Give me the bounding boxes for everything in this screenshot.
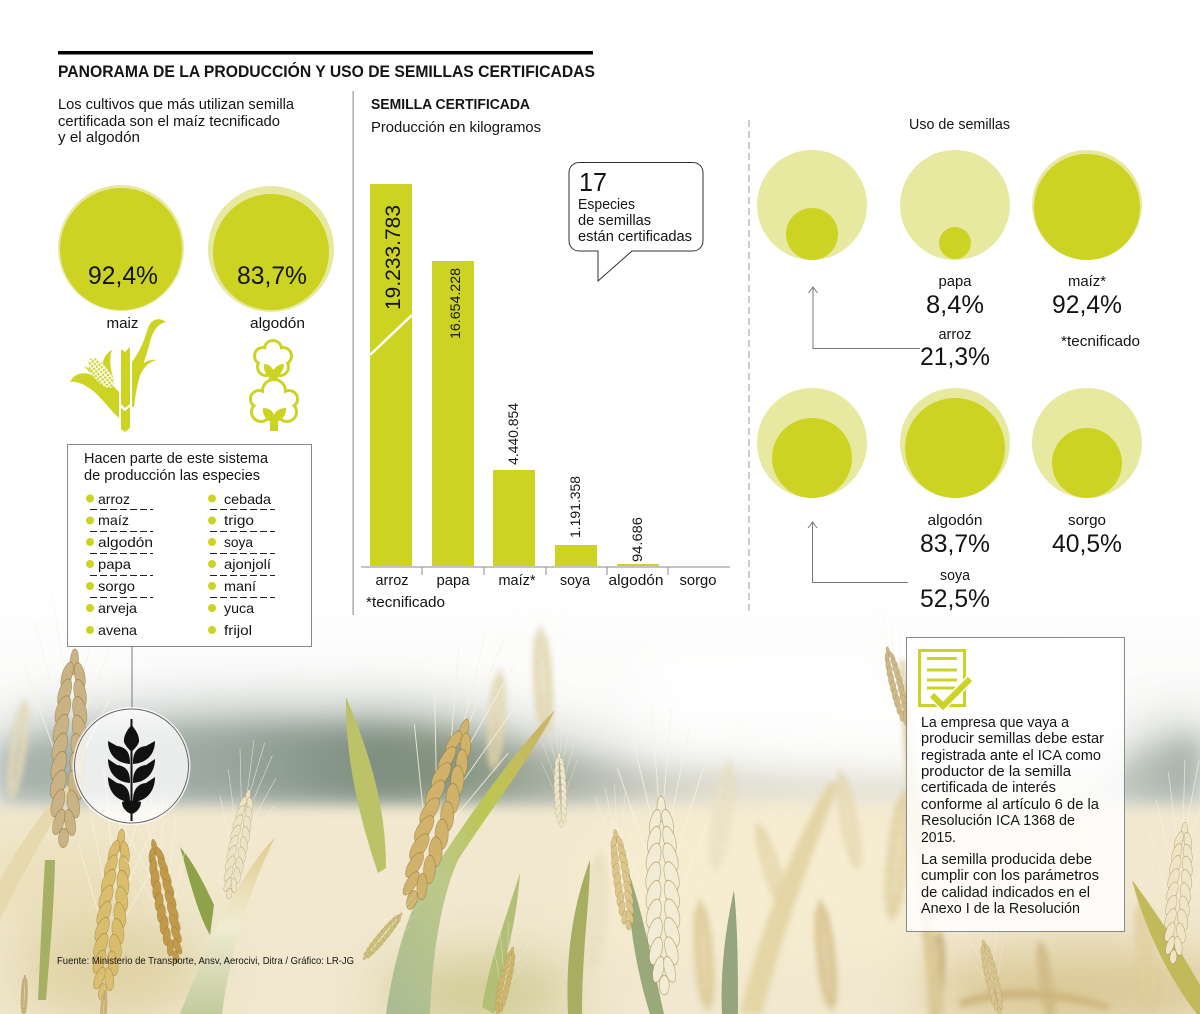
intro text (58, 97, 295, 146)
requirements text: registrada ante el ICA como (921, 748, 1101, 764)
requirements text: de calidad indicados en el (921, 885, 1090, 901)
source: Fuente: Ministerio de Transporte, Ansv, Aerocivi, Ditra / Gráfico: LR-JG (57, 955, 354, 967)
top rule (58, 51, 593, 54)
axis labels: soya (560, 573, 591, 589)
circle: papa use (900, 150, 1010, 260)
list names: soya (224, 534, 253, 550)
icon: corn plant (70, 319, 166, 432)
label: sorgo (1052, 513, 1122, 558)
label: maiz: maiz (106, 316, 138, 332)
label: algodon: algodón (928, 513, 982, 529)
label: maiz tecnificado: maíz* (1068, 274, 1106, 290)
axis labels: arroz (376, 573, 408, 589)
bar: soya: 1.191.358 (567, 476, 583, 538)
requirements text: 2015. (921, 830, 956, 846)
panel: requirements (906, 638, 1124, 932)
chart subtitle: Producción en kilogramos (371, 120, 541, 136)
icon: document with check (920, 650, 970, 706)
list heading (84, 451, 269, 484)
bar: algodon: 94.686 (629, 517, 645, 562)
circle: algodon use (900, 388, 1010, 498)
intro text: certificada son el maíz tecnificado (58, 114, 280, 130)
circle: arroz use (757, 150, 867, 260)
bar: papa: 16.654.228 (447, 268, 463, 339)
axis labels: sorgo (680, 573, 716, 589)
circle: soya use (757, 388, 867, 498)
panel: species list (68, 444, 312, 646)
callout: 17 (579, 167, 607, 197)
list names (98, 491, 271, 638)
list dividers (90, 510, 275, 598)
label: algodon (920, 513, 990, 558)
list names: trigo (224, 512, 254, 528)
label: arroz: 21,3% (920, 343, 990, 371)
label: algodon: algodón (250, 316, 305, 332)
label: algodon: 83,7% (920, 530, 990, 558)
wheat spikes (14, 559, 1200, 1014)
axis (361, 567, 730, 575)
list heading: de producción las especies (84, 468, 260, 484)
callout: Especies (578, 197, 635, 213)
leaves (0, 697, 1200, 1014)
bar: algodon (617, 517, 659, 566)
list names: frijol (224, 622, 252, 638)
label: arroz: arroz (938, 327, 972, 343)
vertical divider (352, 91, 354, 615)
requirements text: La semilla producida debe (921, 852, 1092, 868)
axis labels (376, 573, 716, 589)
list names: cebada (224, 491, 271, 507)
label: papa (926, 274, 984, 319)
label: papa: papa (938, 274, 972, 290)
arrow: arroz (808, 287, 920, 348)
requirements text: La empresa que vaya a (921, 715, 1070, 731)
requirements text: certificada de interés (921, 780, 1056, 796)
circle: sorgo use (1032, 388, 1142, 498)
list names: maíz (98, 512, 129, 528)
requirements text: productor de la semilla (921, 764, 1072, 780)
label: soya: 52,5% (920, 585, 990, 613)
far blurred stalks (0, 574, 1179, 1014)
callout: están certificadas (578, 229, 692, 245)
label: soya (920, 568, 990, 613)
requirements text: cumplir con los parámetros (921, 868, 1099, 884)
list names: ajonjolí (224, 556, 271, 572)
circle: maiz use (1032, 150, 1142, 260)
requirements text: Resolución ICA 1368 de (921, 813, 1075, 829)
icon: cotton (249, 339, 299, 431)
label: maiz tecnificado (1052, 274, 1122, 319)
panel: algodon share circle: 83,7% (237, 262, 307, 290)
axis labels: algodón (608, 573, 664, 589)
label: sorgo: sorgo (1068, 513, 1106, 529)
axis labels: papa (436, 573, 470, 589)
connector line (132, 646, 133, 710)
bar: maiz (493, 403, 535, 566)
requirements text: conforme al artículo 6 de la (921, 797, 1100, 813)
icon: wheat badge (72, 707, 190, 825)
bar: arroz: 19.233.783 (382, 205, 405, 310)
chart footnote: *tecnificado (366, 595, 445, 611)
list names: maní (224, 578, 256, 594)
callout: de semillas (578, 213, 651, 229)
list names: arroz (98, 491, 130, 507)
panel: algodon share circle (208, 186, 334, 312)
bar: papa (432, 261, 474, 566)
bar: soya (555, 476, 597, 566)
footnote: tecnificado: *tecnificado (1061, 334, 1140, 350)
list names: avena (98, 622, 137, 638)
callout (569, 162, 703, 281)
list names: yuca (224, 600, 254, 616)
intro text: Los cultivos que más utilizan semilla (58, 97, 295, 113)
bar chart (361, 184, 730, 589)
list heading: Hacen parte de este sistema (84, 451, 269, 467)
list names: algodón (98, 534, 153, 550)
panel: maiz share circle (58, 185, 184, 311)
bar: maiz: 4.440.854 (505, 403, 521, 465)
list names: arveja (98, 600, 137, 616)
label: arroz (920, 327, 990, 371)
list names: papa (98, 556, 131, 572)
requirements text (921, 715, 1104, 917)
list names: sorgo (98, 578, 135, 594)
intro text: y el algodón (58, 130, 140, 146)
bar: arroz (370, 184, 412, 566)
title: PANORAMA DE LA PRODUCCIÓN Y USO DE SEMILLAS CERTIFICADAS (58, 62, 595, 81)
chart heading: SEMILLA CERTIFICADA (371, 97, 530, 113)
dashed divider (748, 120, 750, 615)
list bullets (86, 494, 216, 634)
label: soya: soya (940, 568, 971, 584)
label: maiz tecnificado: 92,4% (1052, 291, 1122, 319)
requirements text: Anexo I de la Resolución (921, 901, 1080, 917)
arrow: soya (808, 522, 908, 582)
label: papa: 8,4% (926, 291, 984, 319)
label: sorgo: 40,5% (1052, 530, 1122, 558)
requirements text: producir semillas debe estar (921, 731, 1104, 747)
right column heading: Uso de semillas (909, 117, 1010, 133)
axis labels: maíz* (498, 573, 536, 589)
panel: maiz share circle: 92,4% (88, 262, 158, 290)
